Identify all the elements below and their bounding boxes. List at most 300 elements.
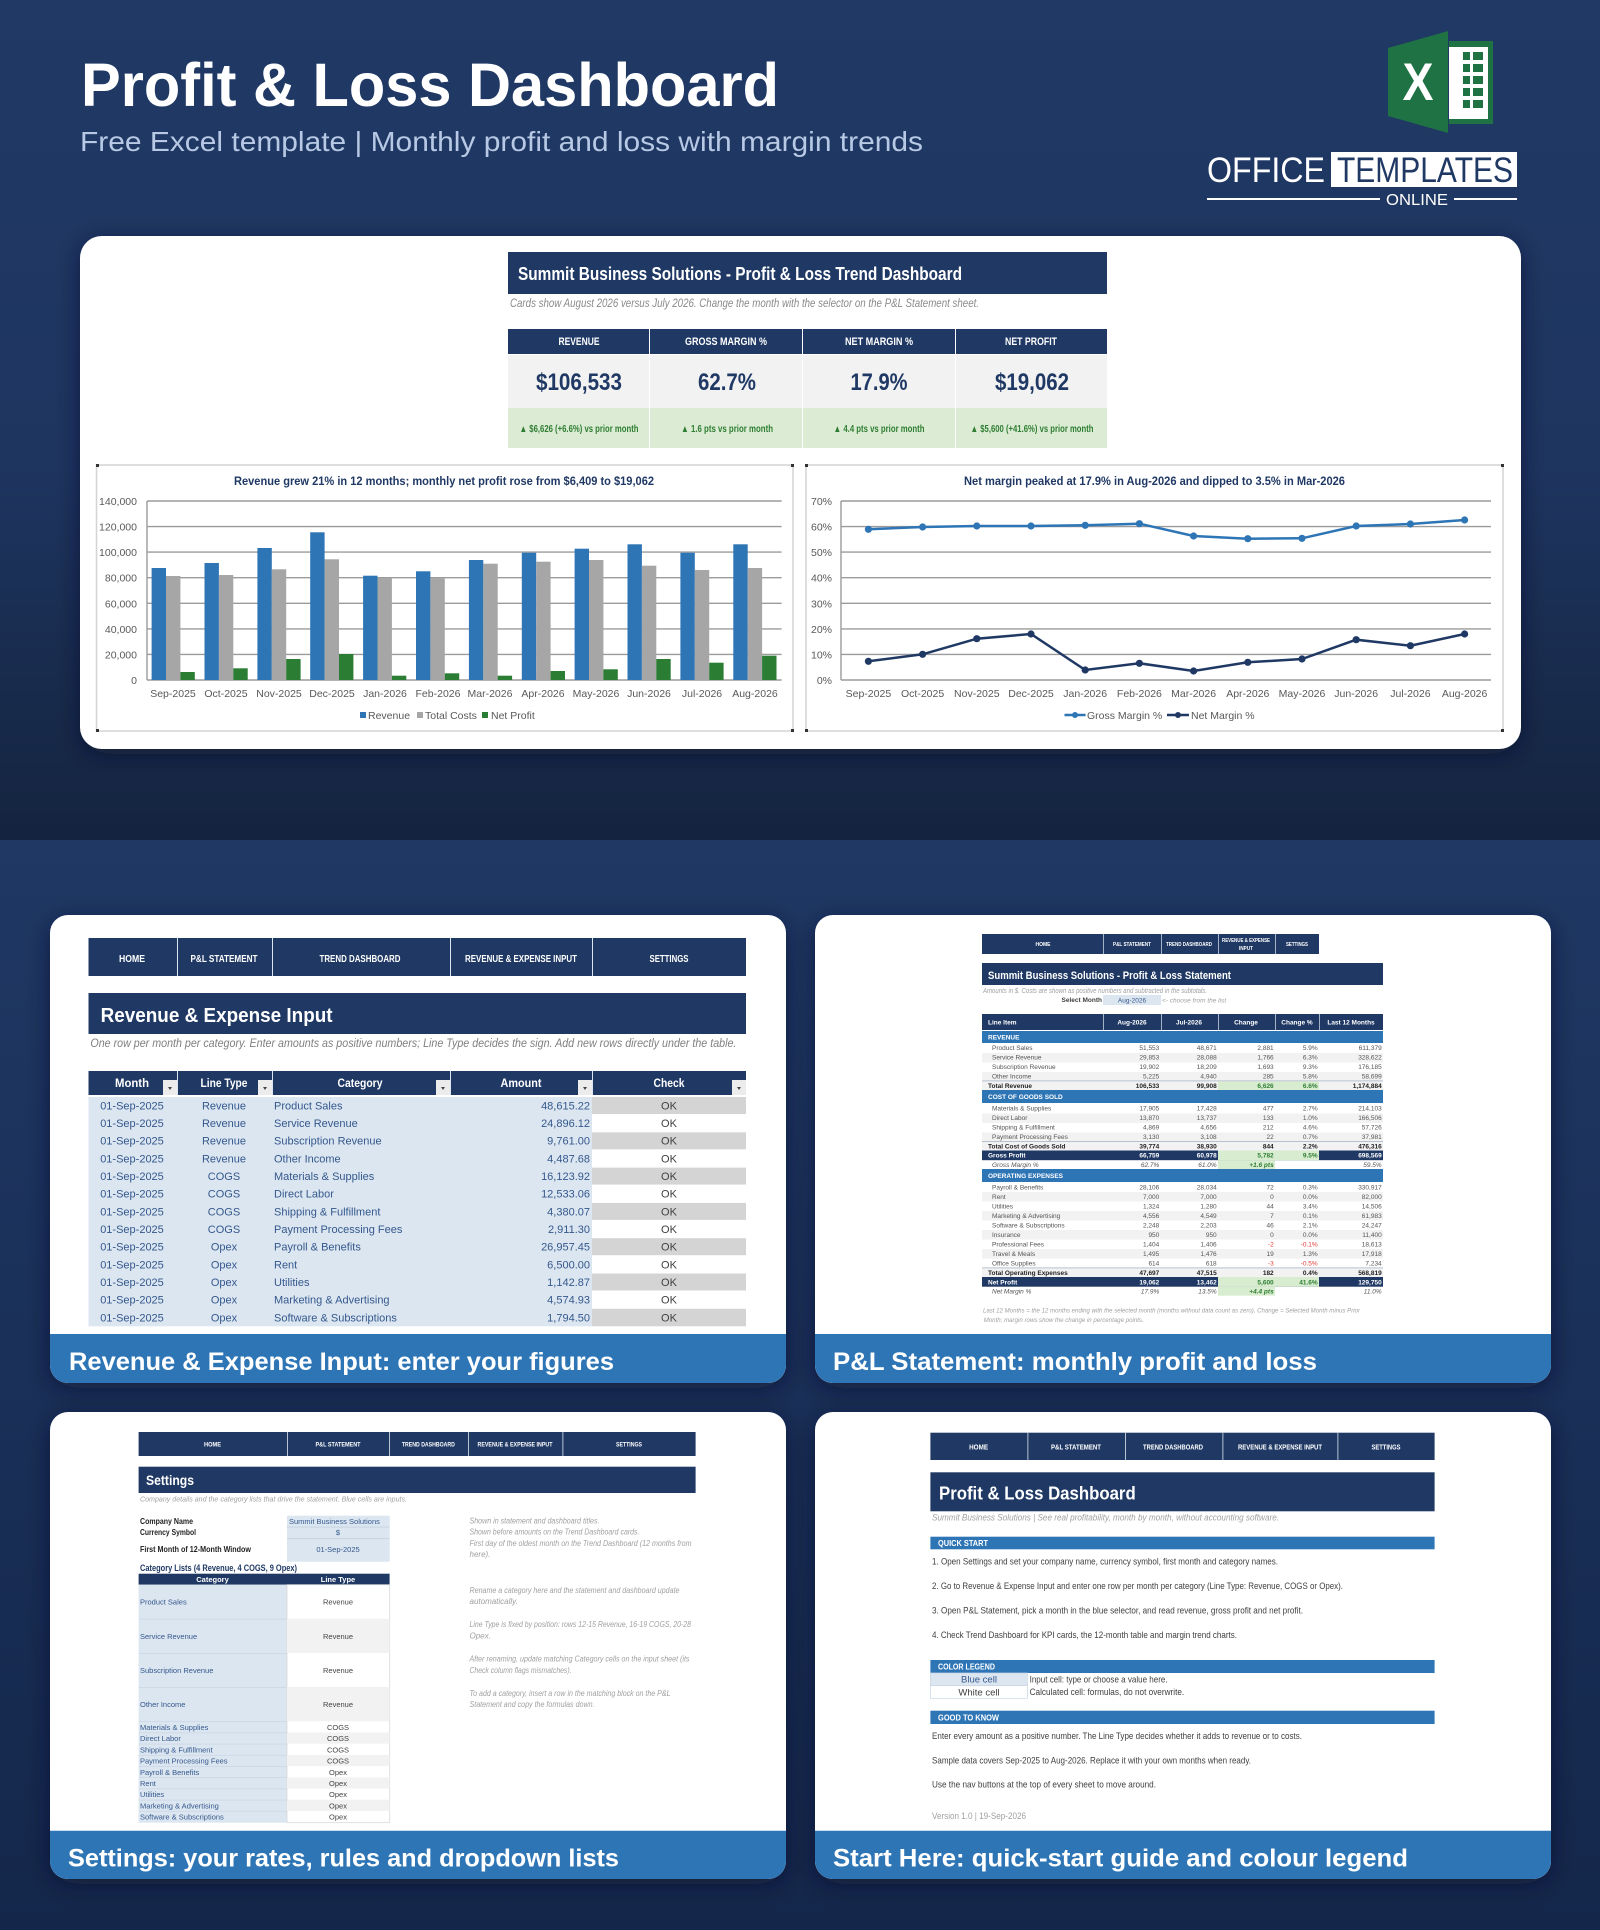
company settings: First Month of 12-Month Window (140, 1545, 252, 1554)
operating expenses block: 568,819 (1358, 1270, 1382, 1277)
x axis labels: Nov-2025 (954, 688, 1000, 700)
operating expenses block: 0 (1270, 1232, 1274, 1239)
net profit rows: 5,600 (1257, 1280, 1274, 1286)
data table: 01-Sep-2025 (100, 1295, 164, 1307)
operating expenses block: 7,000 (1200, 1194, 1217, 1201)
operating expenses block: Travel & Meals (992, 1251, 1036, 1258)
chart title: Net margin peaked at 17.9% in Aug-2026 and dipped to 3.5% in Mar-2026 (964, 474, 1345, 488)
gross profit rows: 61.0% (1198, 1162, 1217, 1169)
month selector: <- choose from the list (1162, 998, 1227, 1004)
chart legend: Gross Margin % (1087, 710, 1162, 722)
operating expenses block: 182 (1263, 1270, 1274, 1277)
background: upper section (0, 0, 1600, 840)
data table: OK (661, 1277, 678, 1289)
category table: Line Type (321, 1575, 355, 1584)
settings notes: To add a category, insert a row in the matching block on the P&L (470, 1689, 670, 1698)
cost of goods sold block: 4,656 (1200, 1124, 1217, 1131)
category table: Subscription Revenue (140, 1666, 213, 1675)
y axis labels: 40% (811, 573, 832, 585)
cost of goods sold block: 133 (1263, 1115, 1274, 1122)
footnote: Month; margin rows show the change in percentage points. (984, 1317, 1144, 1324)
category table: Software & Subscriptions (140, 1813, 224, 1822)
y axis labels: 0 (131, 675, 137, 687)
main title: Profit & Loss Dashboard (81, 51, 779, 119)
category table: Product Sales (140, 1598, 187, 1607)
cost of goods sold block: 13,870 (1139, 1115, 1160, 1122)
revenue block: 9.3% (1303, 1064, 1318, 1071)
operating expenses block: 0.0% (1303, 1194, 1318, 1201)
net profit rows: 13,462 (1197, 1280, 1217, 1286)
x axis labels: May-2026 (1279, 688, 1326, 700)
cost of goods sold block: 212 (1263, 1124, 1274, 1131)
data table: Payment Processing Fees (274, 1224, 403, 1236)
operating expenses block: 7 (1270, 1213, 1274, 1220)
data table: Materials & Supplies (274, 1171, 375, 1183)
chart legend (360, 710, 535, 722)
category table: Service Revenue (140, 1632, 197, 1641)
navigation bar (930, 1433, 1435, 1460)
category table: Revenue (323, 1700, 353, 1709)
y axis labels: 30% (811, 598, 832, 610)
y axis labels: 10% (811, 649, 832, 661)
operating expenses block: -0.5% (1301, 1261, 1318, 1268)
cost of goods sold block: Direct Labor (992, 1115, 1028, 1122)
net profit rows: 13.5% (1198, 1289, 1217, 1296)
revenue block: 51,553 (1139, 1045, 1160, 1052)
sheet title band: Profit & Loss Dashboard (939, 1482, 1136, 1503)
x axis labels: Jan-2026 (363, 688, 407, 700)
y axis labels: 60% (811, 522, 832, 534)
navigation bar: TREND DASHBOARD (1166, 942, 1212, 948)
operating expenses block: Payroll & Benefits (992, 1185, 1044, 1192)
revenue block: REVENUE (988, 1034, 1020, 1042)
x axis labels: Jun-2026 (1334, 688, 1378, 700)
operating expenses block: 4,549 (1200, 1213, 1217, 1220)
navigation bar (88, 938, 746, 976)
data table: COGS (208, 1189, 240, 1201)
data table: COGS (208, 1206, 240, 1218)
bar chart: revenue, total costs, net profit (96, 464, 794, 732)
navigation bar: REVENUE & EXPENSE INPUT (465, 954, 577, 965)
operating expenses block: 7,000 (1143, 1194, 1160, 1201)
navigation bar: SETTINGS (616, 1441, 643, 1448)
operating expenses block: Insurance (992, 1232, 1021, 1239)
good to know section: Use the nav buttons at the top of every sheet to move around. (932, 1780, 1156, 1791)
data table: OK (661, 1153, 678, 1165)
good to know section (930, 1711, 1435, 1791)
quick start section (930, 1537, 1435, 1641)
y axis labels: 80,000 (105, 573, 137, 585)
gross profit rows: 60,978 (1197, 1153, 1217, 1160)
navigation bar: INPUT (1239, 946, 1254, 952)
revenue block: 176,185 (1358, 1064, 1382, 1071)
total costs bars (166, 559, 762, 680)
data table: Shipping & Fulfillment (274, 1206, 380, 1218)
x axis labels: Aug-2026 (732, 688, 778, 700)
settings notes: automatically. (470, 1597, 518, 1606)
x axis labels: Oct-2025 (901, 688, 944, 700)
data table: 4,487.68 (547, 1153, 590, 1165)
navigation bar: SETTINGS (1372, 1444, 1401, 1451)
icon: Excel: X (1402, 53, 1434, 112)
statement header: Change % (1281, 1020, 1313, 1026)
caption band: Start Here: quick-start guide and colour legend (833, 1845, 1408, 1873)
operating expenses block: 47,515 (1197, 1270, 1217, 1277)
x axis labels: Feb-2026 (416, 688, 461, 700)
data table: Rent (274, 1259, 297, 1271)
cost of goods sold block: 844 (1263, 1143, 1274, 1150)
revenue block: 48,671 (1197, 1045, 1217, 1052)
x axis labels: Mar-2026 (1171, 688, 1216, 700)
net profit bars (180, 654, 776, 680)
dashboard title band (508, 252, 1107, 294)
gross profit rows: 9.5% (1303, 1153, 1318, 1160)
data table: Product Sales (274, 1100, 343, 1112)
caption band (50, 1831, 786, 1879)
x axis labels: Oct-2025 (204, 688, 248, 700)
KPI: gross margin: 62.7% (698, 369, 756, 396)
icon: Excel (1388, 31, 1493, 133)
wordmark: TEMPLATES: TEMPLATES (1337, 151, 1513, 190)
background: lower section (0, 840, 1600, 1930)
colour legend section: White cell (958, 1687, 1000, 1698)
quick start section: 4. Check Trend Dashboard for KPI cards, the 12-month table and margin trend charts. (932, 1630, 1237, 1641)
gross profit rows (982, 1150, 1383, 1169)
x axis labels: Dec-2025 (1008, 688, 1054, 700)
statement header: Last 12 Months (1327, 1020, 1375, 1026)
x axis labels: Aug-2026 (1442, 688, 1488, 700)
net profit rows: Net Profit (988, 1280, 1018, 1286)
data table: Opex (211, 1277, 238, 1289)
line chart: gross and net margin (805, 464, 1504, 732)
revenue block: 285 (1263, 1074, 1274, 1080)
navigation bar: SETTINGS (1286, 942, 1308, 948)
x axis labels: Mar-2026 (468, 688, 513, 700)
table header with filter buttons: Month (115, 1076, 149, 1090)
data table: 01-Sep-2025 (100, 1206, 164, 1218)
cost of goods sold block: COST OF GOODS SOLD (988, 1094, 1063, 1101)
settings notes: Rename a category here and the statement and dashboard update (470, 1586, 680, 1595)
settings notes: Shown before amounts on the Trend Dashboard cards. (470, 1528, 640, 1537)
good to know section: Enter every amount as a positive number. The Line Type decides whether it adds to revenue or to costs. (932, 1731, 1302, 1742)
KPI: revenue: ▲ $6,626 (+6.6%) vs prior month (520, 424, 638, 435)
operating expenses block: 28,106 (1139, 1185, 1160, 1192)
net profit rows: Net Margin % (992, 1289, 1032, 1296)
cost of goods sold block: Shipping & Fulfillment (992, 1124, 1055, 1131)
month selector: Select Month (1062, 997, 1102, 1004)
data table: Revenue (202, 1100, 246, 1112)
revenue bars (152, 532, 748, 680)
operating expenses block: 614 (1148, 1261, 1160, 1268)
revenue block (982, 1031, 1383, 1090)
operating expenses block: 1,404 (1143, 1242, 1160, 1249)
KPI: revenue: REVENUE (558, 336, 600, 348)
x axis labels: Apr-2026 (1226, 688, 1270, 700)
data table: OK (661, 1259, 678, 1271)
x axis labels: Jan-2026 (1063, 688, 1107, 700)
month selector (1062, 995, 1227, 1005)
revenue block: 58,699 (1362, 1074, 1382, 1080)
KPI: net margin: NET MARGIN % (845, 336, 913, 348)
revenue block: 611,379 (1359, 1045, 1382, 1052)
operating expenses block: 61,983 (1362, 1213, 1382, 1220)
colour legend section: Input cell: type or choose a value here. (1030, 1674, 1168, 1685)
KPI: net margin (834, 336, 924, 435)
y axis labels: 140,000 (99, 496, 137, 508)
operating expenses block: Marketing & Advertising (992, 1213, 1061, 1220)
category table: Shipping & Fulfillment (140, 1745, 213, 1754)
data table: COGS (208, 1224, 240, 1236)
revenue block: 106,533 (1136, 1083, 1160, 1090)
category lists heading: Category Lists (4 Revenue, 4 COGS, 9 Opex) (140, 1563, 297, 1574)
panel: Settings (50, 1412, 786, 1879)
data table: 01-Sep-2025 (100, 1277, 164, 1289)
y axis labels: 60,000 (105, 598, 137, 610)
category table: Materials & Supplies (140, 1723, 209, 1732)
data table: Opex (211, 1259, 238, 1271)
revenue block: 1,174,884 (1353, 1083, 1382, 1090)
data table: 48,615.22 (541, 1100, 590, 1112)
x axis labels: Jun-2026 (627, 688, 671, 700)
wordmark: OFFICE: OFFICE (1207, 151, 1325, 190)
cost of goods sold block: Materials & Supplies (992, 1105, 1052, 1112)
operating expenses block: Office Supplies (992, 1261, 1036, 1268)
revenue block: 28,088 (1197, 1054, 1217, 1062)
company settings: Currency Symbol (140, 1528, 196, 1537)
KPI: net margin: ▲ 4.4 pts vs prior month (834, 424, 924, 435)
navigation bar: REVENUE & EXPENSE INPUT (1238, 1444, 1323, 1451)
operating expenses block: 72 (1266, 1185, 1274, 1192)
revenue block: 4,940 (1200, 1074, 1217, 1080)
operating expenses block: 1.3% (1303, 1251, 1318, 1258)
chart legend: Total Costs (425, 710, 477, 722)
cost of goods sold block: 2.7% (1303, 1105, 1318, 1112)
data table: OK (661, 1312, 678, 1324)
y axis labels: 20,000 (105, 649, 137, 661)
data table: 01-Sep-2025 (100, 1100, 164, 1112)
x axis labels: May-2026 (573, 688, 620, 700)
navigation bar: REVENUE & EXPENSE (1222, 938, 1270, 944)
y axis labels: 100,000 (99, 547, 137, 559)
net profit rows: 129,750 (1358, 1280, 1382, 1286)
data table: 1,142.87 (547, 1277, 590, 1289)
footnote (983, 1308, 1361, 1324)
data table: 4,380.07 (547, 1206, 590, 1218)
cost of goods sold block: 37,981 (1362, 1134, 1382, 1141)
data table: Opex (211, 1312, 238, 1324)
KPI: gross margin: ▲ 1.6 pts vs prior month (681, 424, 773, 435)
chart legend: Revenue (368, 710, 410, 722)
settings notes: Opex. (470, 1632, 491, 1641)
data table: 26,957.45 (541, 1242, 590, 1254)
settings notes: Check column flags mismatches). (470, 1666, 572, 1675)
cost of goods sold block: 22 (1266, 1134, 1274, 1141)
cost of goods sold block: Payment Processing Fees (992, 1134, 1069, 1141)
net profit rows: +4.4 pts (1249, 1289, 1274, 1296)
navigation bar: HOME (204, 1441, 222, 1448)
operating expenses block: 82,000 (1362, 1194, 1382, 1201)
operating expenses block: OPERATING EXPENSES (988, 1173, 1064, 1180)
table header with filter buttons (88, 1071, 746, 1095)
revenue block: Subscription Revenue (992, 1064, 1056, 1071)
statement header (982, 1014, 1383, 1030)
caption band: Settings: your rates, rules and dropdown lists (68, 1845, 619, 1873)
operating expenses block: 2.1% (1303, 1223, 1318, 1230)
cost of goods sold block: 477 (1263, 1105, 1274, 1112)
panel: Start Here (815, 1412, 1551, 1879)
good to know section: GOOD TO KNOW (938, 1712, 1000, 1722)
data table: 6,500.00 (547, 1259, 590, 1271)
x axis labels: Dec-2025 (309, 688, 355, 700)
category table: Payroll & Benefits (140, 1768, 199, 1777)
x axis labels (846, 688, 1488, 700)
operating expenses block: Total Operating Expenses (988, 1270, 1068, 1277)
data table: Revenue (202, 1136, 246, 1148)
revenue block: 5,225 (1143, 1074, 1160, 1080)
cost of goods sold block: 4.6% (1303, 1124, 1318, 1131)
gross margin line (865, 516, 1468, 542)
y axis labels: 120,000 (99, 522, 137, 534)
data table: OK (661, 1171, 678, 1183)
chart legend: Net Margin % (1191, 710, 1255, 722)
operating expenses block: 14,506 (1362, 1204, 1382, 1211)
y axis labels (99, 496, 137, 687)
KPI: net profit: ▲ $5,600 (+41.6%) vs prior month (970, 424, 1094, 435)
good to know section: Sample data covers Sep-2025 to Aug-2026. Replace it with your own months when ready. (932, 1755, 1251, 1766)
operating expenses block: 11,400 (1362, 1232, 1382, 1239)
settings notes: Shown in statement and dashboard titles. (470, 1516, 600, 1525)
x axis labels: Nov-2025 (256, 688, 302, 700)
data table: 01-Sep-2025 (100, 1242, 164, 1254)
navigation bar: SETTINGS (650, 954, 689, 965)
cost of goods sold block: 13,737 (1197, 1115, 1217, 1122)
settings notes: Statement and copy the formulas down. (470, 1700, 594, 1709)
operating expenses block: 47,697 (1139, 1270, 1160, 1277)
quick start section: 2. Go to Revenue & Expense Input and enter one row per month per category (Line Type: Revenue, COGS or Opex). (932, 1581, 1343, 1592)
category table: Opex (329, 1779, 347, 1788)
sheet title band: Settings (146, 1472, 194, 1488)
revenue block: Product Sales (992, 1045, 1033, 1052)
data table: 01-Sep-2025 (100, 1171, 164, 1183)
company settings: Company Name (140, 1517, 193, 1526)
company settings: 01-Sep-2025 (316, 1545, 360, 1554)
data table: Marketing & Advertising (274, 1295, 390, 1307)
category table: COGS (327, 1745, 349, 1754)
caption band (50, 1334, 786, 1383)
statement header: Line Item (988, 1020, 1017, 1026)
operating expenses block: -0.1% (1301, 1242, 1318, 1249)
sheet title band: Revenue & Expense Input (101, 1005, 333, 1027)
operating expenses block: 0.1% (1303, 1213, 1318, 1220)
cost of goods sold block: 1.0% (1303, 1115, 1318, 1122)
KPI: net profit (970, 336, 1094, 435)
table header with filter buttons: Check (654, 1076, 685, 1090)
data table: Other Income (274, 1153, 341, 1165)
operating expenses block: 1,280 (1200, 1204, 1217, 1211)
operating expenses block: 2,248 (1143, 1223, 1160, 1230)
statement header: Change (1234, 1020, 1258, 1026)
data table: 4,574.93 (547, 1295, 590, 1307)
KPI: revenue: $106,533 (536, 369, 622, 396)
operating expenses block: 19 (1266, 1251, 1274, 1258)
x axis labels: Feb-2026 (1117, 688, 1162, 700)
y axis labels: 40,000 (105, 624, 137, 636)
data table: OK (661, 1242, 678, 1254)
table header with filter buttons: Line Type (200, 1076, 248, 1090)
operating expenses block: 17,918 (1362, 1251, 1382, 1258)
caption band: Revenue & Expense Input: enter your figures (69, 1348, 614, 1376)
cost of goods sold block: 38,930 (1197, 1143, 1217, 1150)
cost of goods sold block: 3,108 (1200, 1134, 1217, 1141)
category table: Opex (329, 1813, 347, 1822)
sheet note: Company details and the category lists that drive the statement. Blue cells are inputs. (140, 1495, 407, 1504)
company settings (140, 1516, 390, 1562)
gross profit rows: 62.7% (1141, 1162, 1160, 1169)
panel: hero dashboard card (80, 236, 1521, 749)
caption band (815, 1831, 1551, 1879)
data table: Subscription Revenue (274, 1136, 382, 1148)
dashboard note: Cards show August 2026 versus July 2026. Change the month with the selector on the P&L Statement sheet. (510, 296, 979, 310)
dashboard title band: Summit Business Solutions - Profit & Loss Trend Dashboard (518, 264, 962, 284)
operating expenses block: 18,613 (1362, 1242, 1382, 1249)
cost of goods sold block: 57,726 (1362, 1124, 1382, 1131)
x axis labels (150, 688, 778, 700)
operating expenses block: Utilities (992, 1204, 1014, 1211)
KPI: gross margin: GROSS MARGIN % (685, 336, 767, 348)
operating expenses block: 1,406 (1200, 1242, 1217, 1249)
settings notes: Line Type is fixed by position: rows 12-15 Revenue, 16-19 COGS, 20-28 (470, 1620, 691, 1629)
revenue block: 99,908 (1197, 1083, 1217, 1090)
y axis labels: 50% (811, 547, 832, 559)
cost of goods sold block: 2.2% (1303, 1143, 1318, 1150)
operating expenses block: -3 (1268, 1261, 1274, 1268)
sheet title band: Summit Business Solutions - Profit & Loss Statement (988, 970, 1231, 982)
navigation bar: P&L STATEMENT (316, 1441, 361, 1448)
category table: Marketing & Advertising (140, 1801, 219, 1810)
y axis labels (811, 496, 832, 687)
category table: Revenue (323, 1632, 353, 1641)
navigation bar: REVENUE & EXPENSE INPUT (478, 1441, 553, 1448)
operating expenses block: Software & Subscriptions (992, 1223, 1065, 1230)
revenue block: 6.3% (1303, 1054, 1318, 1062)
sheet title band (88, 993, 746, 1034)
navigation bar (982, 934, 1319, 954)
gross profit rows: Gross Margin % (992, 1162, 1039, 1169)
operating expenses block: 330,917 (1358, 1185, 1382, 1192)
company settings: Summit Business Solutions (289, 1517, 380, 1526)
cost of goods sold block: 4,869 (1143, 1124, 1160, 1131)
data table: OK (661, 1206, 678, 1218)
data table: 01-Sep-2025 (100, 1259, 164, 1271)
settings notes: After renaming, update matching Category cells on the input sheet (its (469, 1655, 690, 1664)
category table: Rent (140, 1779, 157, 1788)
KPI: net margin: 17.9% (850, 369, 908, 396)
operating expenses block: 4,556 (1143, 1213, 1160, 1220)
sheet title band (930, 1472, 1435, 1511)
net profit rows: 17.9% (1141, 1289, 1160, 1296)
operating expenses block: 46 (1266, 1223, 1274, 1230)
data table: Software & Subscriptions (274, 1312, 397, 1324)
data table: OK (661, 1136, 678, 1148)
operating expenses block: 1,476 (1200, 1251, 1217, 1258)
navigation bar (139, 1432, 696, 1456)
navigation bar: TREND DASHBOARD (402, 1441, 455, 1448)
data table: Utilities (274, 1277, 310, 1289)
sheet note: Summit Business Solutions | See real profitability, month by month, without accounting software. (932, 1513, 1279, 1523)
category table: Revenue (323, 1666, 353, 1675)
navigation bar: HOME (119, 954, 145, 965)
panel: Revenue & Expense Input (50, 915, 786, 1383)
